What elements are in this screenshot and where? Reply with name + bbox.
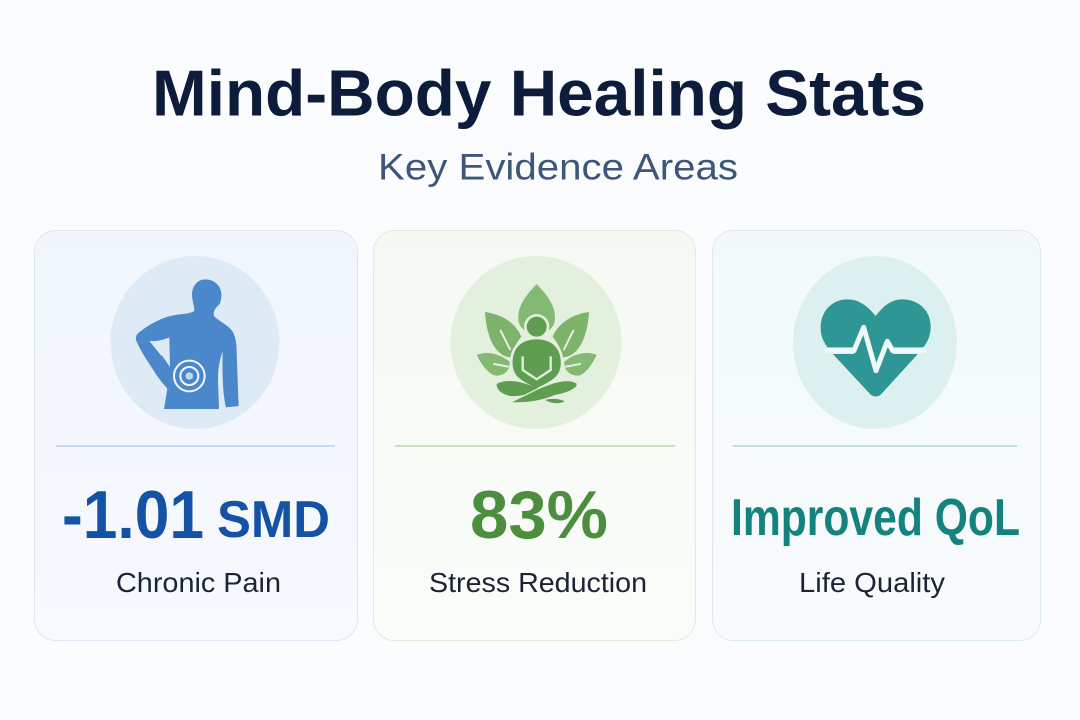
panel: life quality xyxy=(712,230,1040,640)
stat: -1.01 SMD: -1.01 xyxy=(62,477,204,553)
icon: back pain xyxy=(110,256,280,429)
label: chronic pain: Chronic Pain xyxy=(116,567,281,598)
title: Mind-Body Healing Stats xyxy=(152,56,926,130)
panel: stress reduction xyxy=(374,230,696,640)
label: stress reduction: Stress Reduction xyxy=(429,567,647,598)
stat: 83%: 83% xyxy=(470,477,608,553)
stat: -1.01 SMD: SMD xyxy=(217,491,330,549)
icon: meditation lotus xyxy=(450,256,622,429)
label: life quality: Life Quality xyxy=(799,567,945,598)
icon: heart with pulse xyxy=(793,256,957,429)
stat: -1.01 SMD xyxy=(62,477,330,553)
panel: chronic pain xyxy=(34,230,358,640)
subtitle: Key Evidence Areas xyxy=(378,146,738,188)
stat: improved QoL: Improved QoL xyxy=(731,489,1020,547)
